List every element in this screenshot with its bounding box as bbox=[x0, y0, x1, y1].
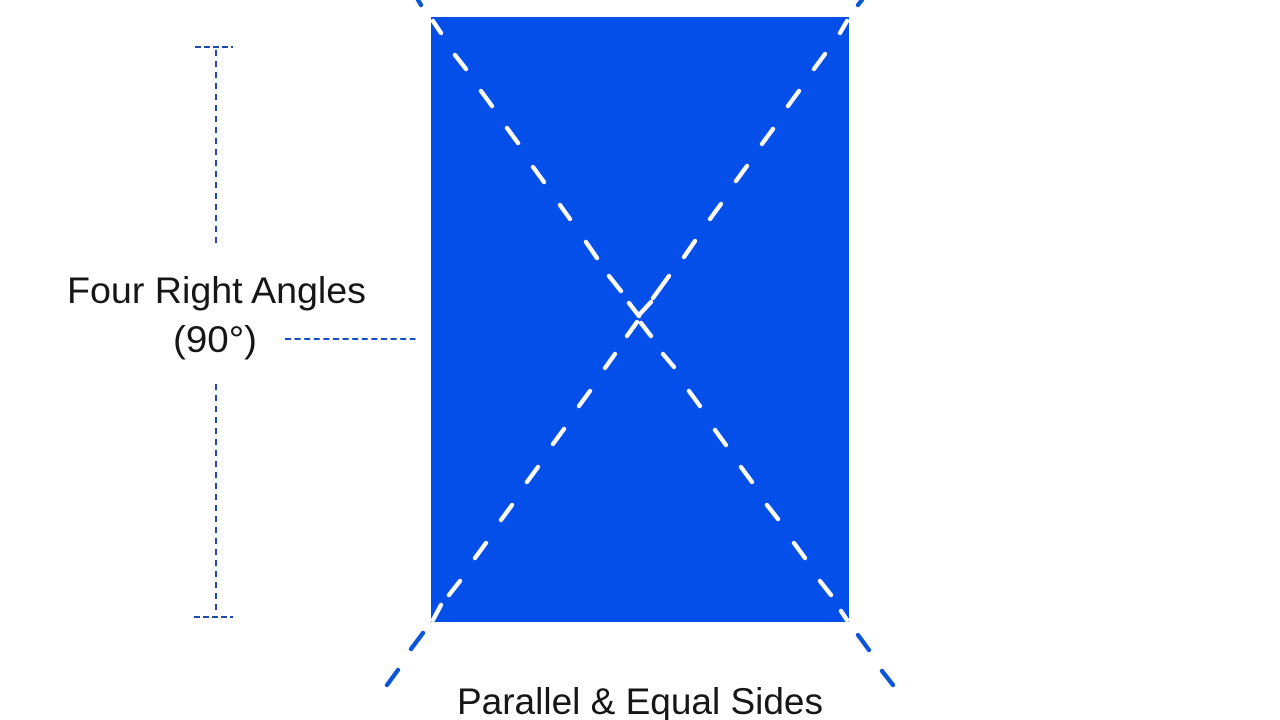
diagonal dashes outside rectangle bbox=[387, 0, 893, 685]
horizontal leader line bbox=[285, 338, 416, 340]
vertical dimension line bbox=[194, 47, 233, 617]
label: four right angles: (90°) bbox=[173, 319, 257, 360]
label: four right angles: Four Right Angles bbox=[67, 270, 366, 311]
blue rectangle bbox=[431, 17, 849, 622]
label: four right angles bbox=[67, 270, 366, 360]
diagonal dashes inside rectangle bbox=[433, 21, 847, 620]
